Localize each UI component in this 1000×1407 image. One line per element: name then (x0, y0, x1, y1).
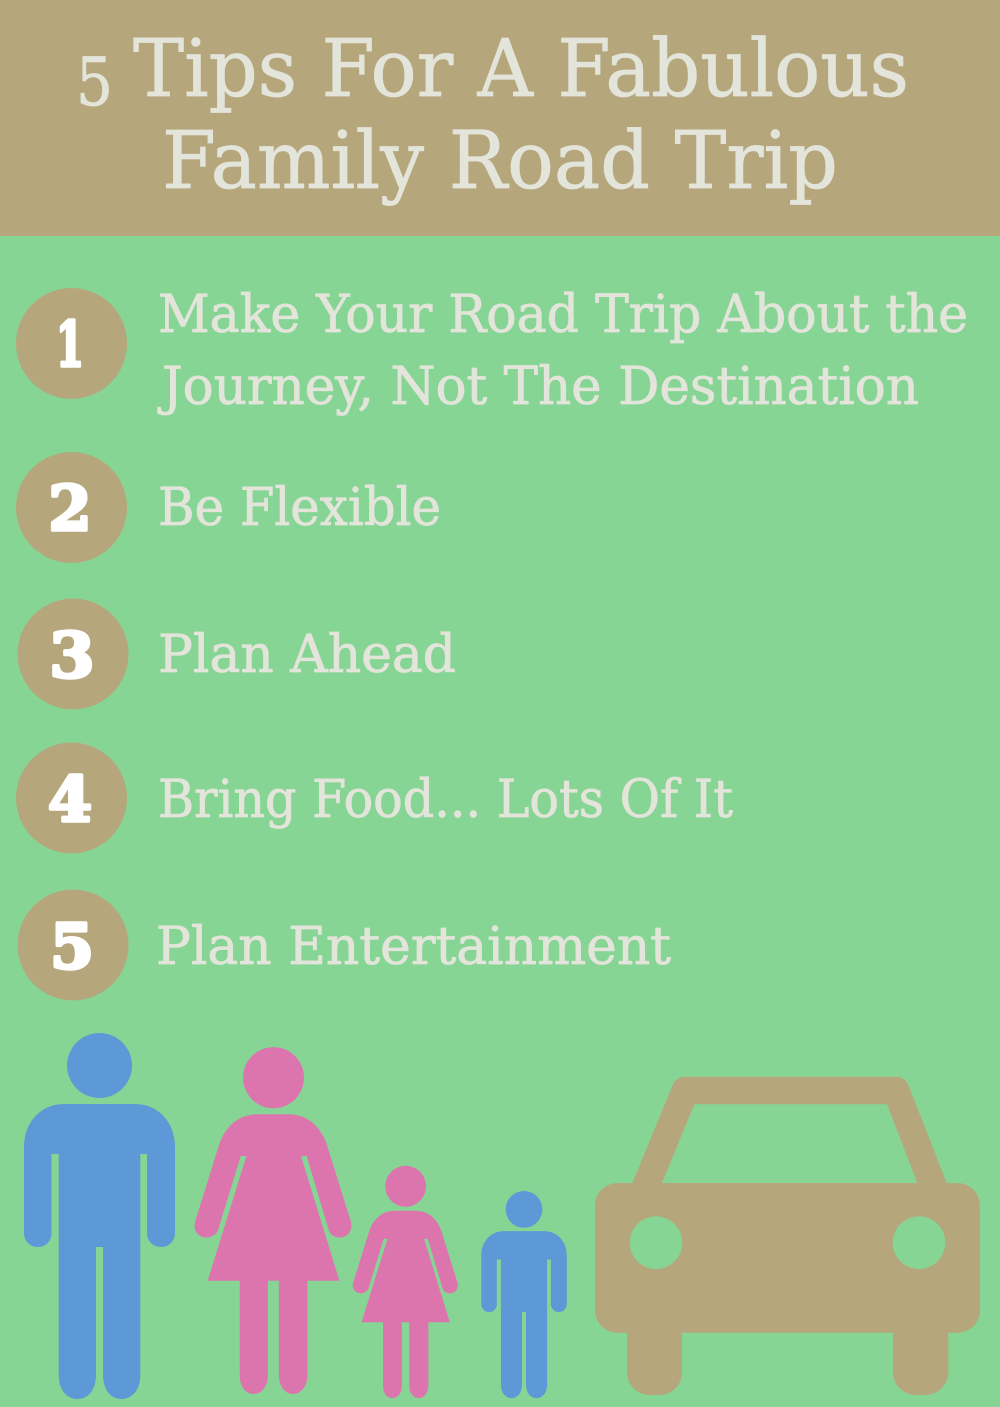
background panel (0, 0, 1000, 236)
tip 2 number badge (16, 452, 127, 563)
icon: son (481, 1191, 567, 1398)
tip 2 text: Be Flexible (158, 478, 441, 538)
title: 5 (76, 44, 113, 121)
title: Family Road Trip (162, 114, 838, 207)
tip 4 number badge (16, 742, 127, 854)
header banner (0, 0, 1000, 236)
title: Tips For A Fabulous (133, 22, 909, 115)
tip 3 number badge (18, 598, 128, 710)
tip 1 text (157, 285, 968, 417)
icon: daughter (353, 1166, 458, 1398)
icon: car (595, 1077, 980, 1395)
tip 4 number badge: 4 (48, 763, 92, 836)
tip 1 number badge: 1 (56, 308, 84, 381)
icon: father (24, 1033, 175, 1399)
icon: mother (195, 1047, 351, 1394)
tip 1 text: Make Your Road Trip About the (158, 285, 968, 345)
tip 5 number badge: 5 (50, 910, 94, 983)
tip 5 number badge (18, 890, 128, 1000)
tip 5 text: Plan Entertainment (156, 917, 671, 977)
tip 4 text: Bring Food... Lots Of It (158, 770, 733, 830)
tip 2 number badge: 2 (48, 472, 92, 545)
tip 3 number badge: 3 (50, 619, 94, 692)
tip 3 text: Plan Ahead (158, 625, 456, 685)
tip 1 text: Journey, Not The Destination (157, 357, 919, 417)
title (76, 22, 909, 207)
tip 1 number badge (16, 288, 127, 399)
